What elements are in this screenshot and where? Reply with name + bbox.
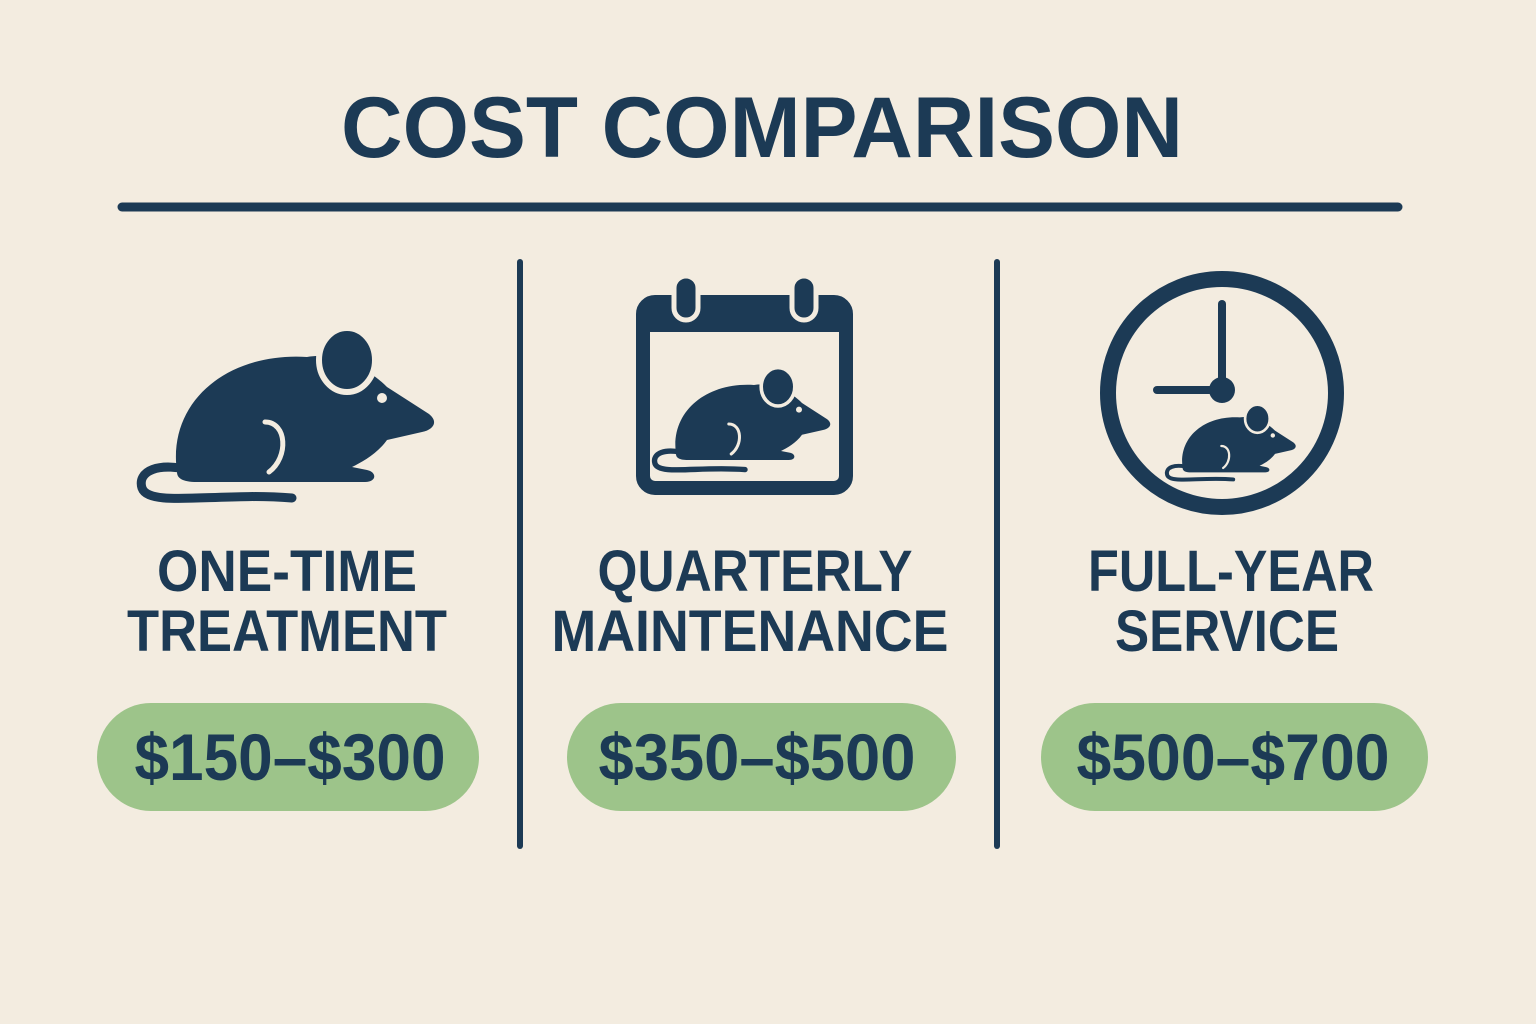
icon: clock with mouse — [1108, 279, 1336, 507]
price pill: $150–$300 — [134, 720, 446, 794]
label: quarterly maintenance — [552, 539, 948, 664]
panel: full-year — [1041, 279, 1428, 811]
panel: one-time — [97, 328, 479, 811]
price pill: $350–$500 — [598, 720, 916, 794]
title: COST COMPARISON — [341, 80, 1183, 176]
label: one-time treatment — [127, 539, 447, 664]
price pill — [97, 703, 479, 811]
price pill — [1041, 703, 1428, 811]
label: one-time treatment: ONE-TIME — [157, 539, 417, 604]
label: quarterly maintenance: MAINTENANCE — [552, 599, 948, 664]
price pill: $500–$700 — [1076, 720, 1390, 794]
label: full-year service: FULL-YEAR — [1088, 539, 1374, 604]
panel: quarterly — [552, 276, 956, 811]
label: quarterly maintenance: QUARTERLY — [598, 539, 912, 604]
icon: calendar with mouse — [643, 276, 846, 488]
label: full-year service — [1088, 539, 1374, 664]
label: full-year service: SERVICE — [1115, 599, 1339, 664]
price pill — [567, 703, 956, 811]
icon: mouse — [141, 328, 434, 498]
label: one-time treatment: TREATMENT — [127, 599, 447, 664]
